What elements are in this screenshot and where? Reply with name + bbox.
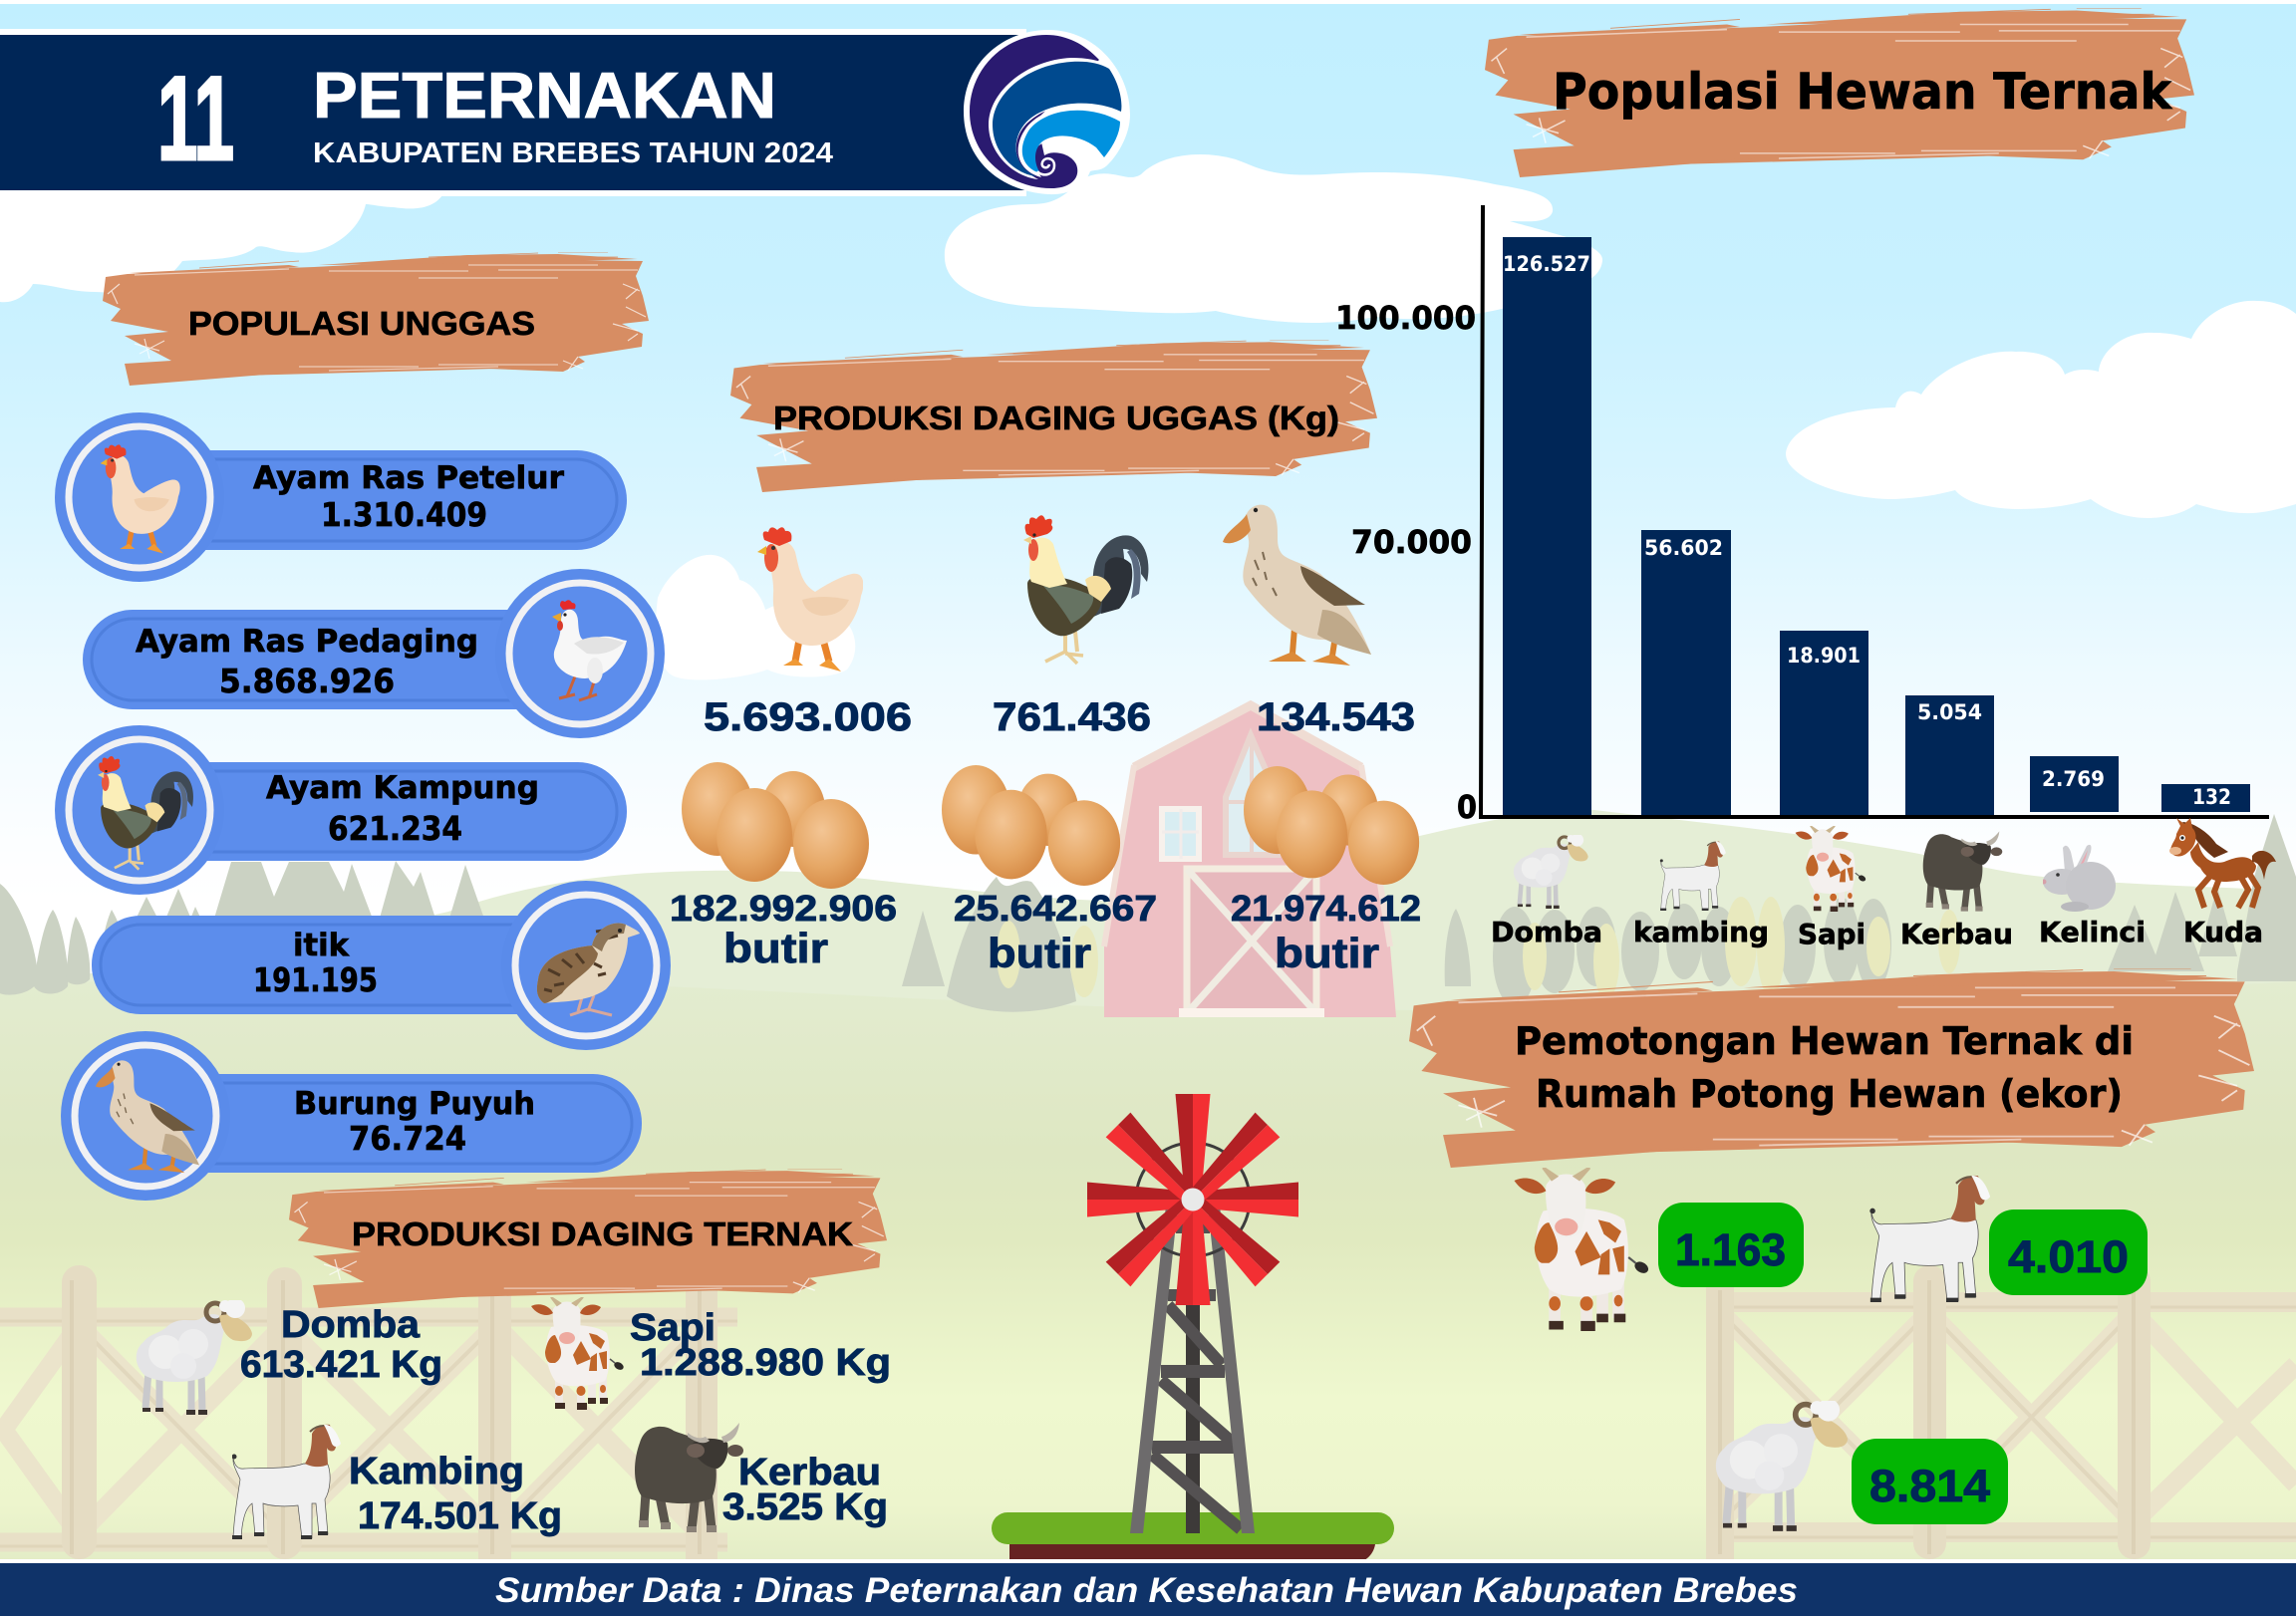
top white strip xyxy=(0,0,2296,4)
bar chart: populasi hewan ternak xyxy=(1335,205,2276,950)
egg count 2: 25.642.667 xyxy=(954,888,1157,929)
card: ayam kampung: Ayam Kampung xyxy=(266,770,539,806)
bar value labels: 126.527 xyxy=(1503,252,1590,276)
kerbau item: Kerbau xyxy=(738,1452,881,1493)
kambing badge xyxy=(1869,1176,2148,1302)
panel: populasi unggas cards xyxy=(55,412,671,1201)
card: ayam kampung: 621.234 xyxy=(328,809,462,848)
heading: populasi hewan ternak: Populasi Hewan Ternak xyxy=(1553,63,2173,121)
heading: produksi daging ternak: PRODUKSI DAGING TERNAK xyxy=(352,1215,853,1252)
card: ayam ras pedaging xyxy=(83,569,665,738)
chart category labels: Kelinci xyxy=(2039,916,2146,948)
egg count 1 xyxy=(670,888,897,971)
icon: itik xyxy=(1223,505,1371,666)
background trees xyxy=(0,814,2296,1012)
sapi badge: 1.163 xyxy=(1675,1224,1786,1275)
panel: pemotongan hewan ternak xyxy=(1515,1168,2148,1531)
domba item: 613.421 Kg xyxy=(240,1344,442,1386)
card: itik: itik xyxy=(293,928,350,963)
chart category icons xyxy=(1514,818,2276,912)
ground xyxy=(0,977,2296,1563)
card: ayam ras pedaging: 5.868.926 xyxy=(219,662,395,700)
icon: Kominfo logo xyxy=(964,30,1130,194)
sapi item: 1.288.980 Kg xyxy=(640,1342,891,1384)
sapi item xyxy=(531,1297,891,1410)
y axis labels xyxy=(1335,299,1477,826)
card: itik xyxy=(92,881,671,1050)
footer source bar xyxy=(0,1559,2296,1616)
egg count 3: 21.974.612 xyxy=(1231,888,1421,929)
sky background xyxy=(0,4,2296,901)
kerbau item xyxy=(635,1423,888,1532)
y axis labels: 100.000 xyxy=(1335,299,1476,337)
egg count 3 xyxy=(1231,888,1421,976)
windmill ring xyxy=(1136,1143,1250,1256)
egg count 1: butir xyxy=(723,925,828,971)
header banner xyxy=(0,29,1130,196)
windmill tower xyxy=(1130,1206,1255,1533)
icon: ayam petelur xyxy=(757,527,863,672)
heading: pemotongan hewan ternak: Rumah Potong Hewan (ekor) xyxy=(1536,1072,2123,1116)
icon: ayam kampung xyxy=(1023,515,1148,664)
footer source bar: Sumber Data : Dinas Peternakan dan Kesehatan Hewan Kabupaten Brebes xyxy=(495,1571,1798,1610)
domba badge: 8.814 xyxy=(1869,1461,1990,1511)
sapi item: Sapi xyxy=(630,1307,716,1349)
heading: produksi daging ternak xyxy=(289,1169,887,1308)
heading: populasi unggas xyxy=(103,252,649,386)
kambing badge: 4.010 xyxy=(2008,1231,2129,1282)
icon: telur 1 xyxy=(682,762,869,889)
kambing item: Kambing xyxy=(349,1451,524,1492)
egg count 3: butir xyxy=(1275,930,1379,976)
heading: populasi hewan ternak xyxy=(1485,8,2194,177)
card: itik: 191.195 xyxy=(253,960,378,999)
chart category labels: Domba xyxy=(1491,916,1602,948)
egg count 2 xyxy=(954,888,1157,976)
value: daging itik: 134.543 xyxy=(1257,695,1415,739)
egg count 1: 182.992.906 xyxy=(670,888,897,929)
card: ayam ras petelur: 1.310.409 xyxy=(321,495,487,534)
hills xyxy=(0,810,2296,1046)
bar value labels: 132 xyxy=(2192,785,2231,809)
card: burung puyuh: 76.724 xyxy=(349,1119,466,1158)
heading: populasi unggas: POPULASI UNGGAS xyxy=(188,305,535,342)
windmill blades xyxy=(1087,1094,1298,1305)
panel: produksi daging unggas xyxy=(670,505,1421,976)
panel: produksi daging ternak xyxy=(137,1297,891,1539)
section number: 11 xyxy=(157,52,234,185)
barn xyxy=(1104,700,1396,1017)
kambing item: 174.501 Kg xyxy=(358,1495,562,1537)
right fence xyxy=(1706,1265,2296,1559)
y axis labels: 0 xyxy=(1457,788,1477,826)
domba badge xyxy=(1716,1399,2008,1531)
egg count 2: butir xyxy=(988,930,1091,976)
chart category labels: Kerbau xyxy=(1900,918,2013,950)
y axis labels: 70.000 xyxy=(1351,523,1472,561)
sapi badge xyxy=(1515,1168,1804,1331)
heading: pemotongan hewan ternak xyxy=(1409,968,2254,1168)
domba item: Domba xyxy=(281,1304,421,1346)
bar value labels: 5.054 xyxy=(1917,700,1982,724)
chart category labels xyxy=(1491,916,2263,950)
heading: produksi daging unggas: PRODUKSI DAGING UGGAS (Kg) xyxy=(773,400,1339,436)
kambing item xyxy=(231,1425,562,1539)
card: ayam ras pedaging: Ayam Ras Pedaging xyxy=(136,624,478,660)
value: daging ayam kampung: 761.436 xyxy=(993,695,1151,739)
heading: produksi daging unggas xyxy=(730,340,1377,492)
bar value labels: 2.769 xyxy=(2042,767,2105,791)
icon: telur 3 xyxy=(1244,766,1419,885)
bar value labels: 56.602 xyxy=(1644,536,1723,560)
value: daging ayam petelur: 5.693.006 xyxy=(704,695,912,739)
heading: pemotongan hewan ternak: Pemotongan Hewan Ternak di xyxy=(1515,1019,2134,1063)
left fence xyxy=(0,1265,737,1559)
card: burung puyuh xyxy=(61,1031,642,1201)
kerbau item: 3.525 Kg xyxy=(722,1486,888,1528)
windmill xyxy=(992,1094,1394,1563)
banner subtitle: KABUPATEN BREBES TAHUN 2024 xyxy=(313,137,833,169)
chart category labels: kambing xyxy=(1633,916,1769,948)
bar value labels: 18.901 xyxy=(1787,644,1861,668)
windmill base xyxy=(992,1512,1394,1563)
clouds xyxy=(0,154,2296,679)
chart category labels: Sapi xyxy=(1798,918,1866,950)
bar value labels xyxy=(1503,252,2231,809)
axes xyxy=(1481,205,2269,817)
card: ayam ras petelur xyxy=(55,412,627,582)
card: ayam ras petelur: Ayam Ras Petelur xyxy=(253,460,565,496)
bars xyxy=(1503,237,2250,818)
banner title: PETERNAKAN xyxy=(313,59,776,132)
icon: telur 2 xyxy=(942,765,1120,886)
domba item xyxy=(137,1298,442,1415)
chart category labels: Kuda xyxy=(2183,916,2263,948)
card: burung puyuh: Burung Puyuh xyxy=(294,1086,535,1122)
card: ayam kampung xyxy=(55,725,627,895)
